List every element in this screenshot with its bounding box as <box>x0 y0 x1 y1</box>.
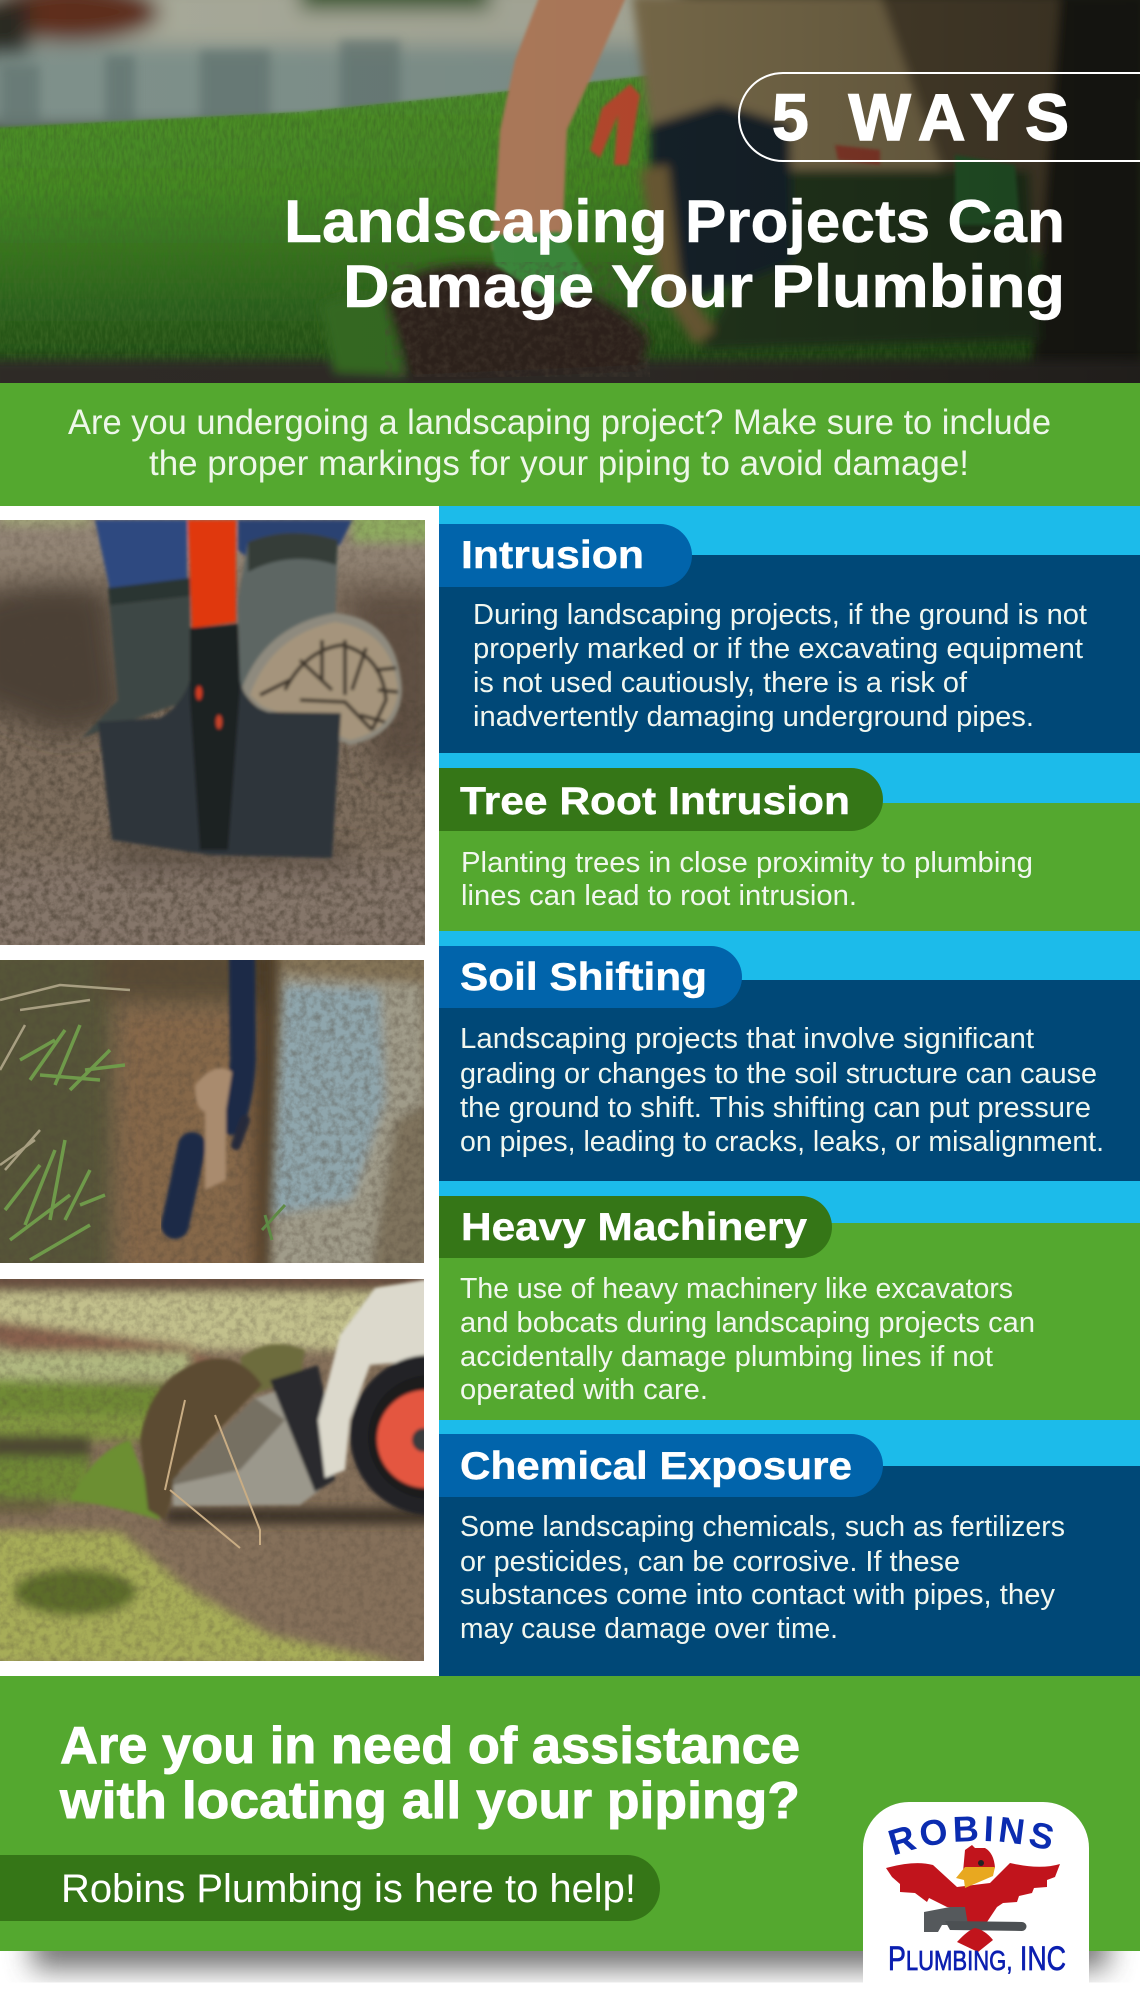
intro banner: Are you undergoing a landscaping project? Make sure to include <box>68 403 1051 442</box>
heading pill: tree root intrusion <box>439 768 883 831</box>
body text: chemical exposure: may cause damage over time. <box>460 1613 838 1645</box>
call to action heading <box>59 1717 800 1830</box>
panel: tree root intrusion <box>439 753 1140 931</box>
heading pill: chemical exposure: Chemical Exposure <box>460 1445 852 1488</box>
photo: worker rolling out turf <box>0 0 1140 400</box>
help pill: Robins Plumbing is here to help! <box>61 1867 636 1911</box>
body text: heavy machinery: The use of heavy machinery like excavators <box>460 1273 1013 1305</box>
logo wordmark: Robins: ROBINS <box>888 1816 1053 1855</box>
photo: tree root breaking a buried pipe <box>0 960 424 1263</box>
photo: boot pushing a shovel into soil <box>0 520 425 945</box>
body text: soil shifting: the ground to shift. This shifting can put pressure <box>460 1092 1091 1124</box>
body text: soil shifting: Landscaping projects that involve significant <box>460 1023 1034 1055</box>
title <box>284 188 1065 320</box>
call to action heading: Are you in need of assistance <box>60 1717 800 1775</box>
body text: heavy machinery: and bobcats during landscaping projects can <box>460 1307 1035 1339</box>
footer drop shadow <box>32 1925 1108 1969</box>
heading pill: heavy machinery: Heavy Machinery <box>461 1206 807 1249</box>
body text: chemical exposure <box>460 1511 1065 1645</box>
panel: soil shifting <box>439 931 1140 1181</box>
5 ways outlined tab: 5 WAYS <box>772 80 1069 154</box>
intro banner: the proper markings for your piping to avoid damage! <box>149 444 969 483</box>
body text: heavy machinery: accidentally damage plumbing lines if not <box>460 1341 993 1373</box>
body text: tree root intrusion <box>461 847 1033 912</box>
body text: tree root intrusion: Planting trees in close proximity to plumbing <box>461 847 1033 879</box>
heading pill: intrusion <box>439 524 692 587</box>
title: Landscaping Projects Can <box>284 188 1065 255</box>
body text: soil shifting <box>460 1023 1104 1158</box>
call to action heading: with locating all your piping? <box>59 1772 800 1830</box>
body text: chemical exposure: substances come into contact with pipes, they <box>460 1579 1056 1611</box>
title: Damage Your Plumbing <box>343 253 1065 320</box>
body text: heavy machinery: operated with care. <box>460 1374 708 1406</box>
heading pill: soil shifting <box>439 946 742 1008</box>
panel: hero photo and title <box>0 0 1140 400</box>
body text: tree root intrusion: lines can lead to root intrusion. <box>461 880 857 912</box>
logo wordmark: Plumbing, Inc: PLUMBING, INC <box>888 1940 1066 1978</box>
panel: chemical exposure <box>439 1420 1140 1676</box>
heading pill: intrusion: Intrusion <box>461 534 644 577</box>
body text: chemical exposure: or pesticides, can be corrosive. If these <box>460 1546 960 1578</box>
heading pill: tree root intrusion: Tree Root Intrusion <box>460 780 850 823</box>
icon: red robin holding a pipe wrench <box>886 1845 1060 1952</box>
heading pill: chemical exposure <box>439 1434 883 1497</box>
body text: intrusion: is not used cautiously, there is a risk of <box>473 667 968 699</box>
intro banner <box>0 383 1140 506</box>
panel: call to action <box>0 1676 1140 1951</box>
heading pill: soil shifting: Soil Shifting <box>460 956 707 999</box>
logo: Robins Plumbing badge <box>863 1802 1089 1982</box>
body text: intrusion: inadvertently damaging underground pipes. <box>473 701 1034 733</box>
body text: soil shifting: on pipes, leading to cracks, leaks, or misalignment. <box>460 1126 1104 1158</box>
panel: intrusion <box>439 506 1140 753</box>
heading pill: heavy machinery <box>439 1196 832 1258</box>
photo: skid steer lifting sod <box>0 1279 424 1661</box>
body text: intrusion: During landscaping projects, if the ground is not <box>473 599 1087 631</box>
5 ways outlined tab <box>739 73 1140 161</box>
help pill <box>0 1855 660 1921</box>
body text: soil shifting: grading or changes to the soil structure can cause <box>460 1058 1097 1090</box>
body text: chemical exposure: Some landscaping chemicals, such as fertilizers <box>460 1511 1065 1543</box>
body text: heavy machinery <box>460 1273 1035 1406</box>
panel: heavy machinery <box>439 1181 1140 1420</box>
body text: intrusion: properly marked or if the excavating equipment <box>473 633 1083 665</box>
body text: intrusion <box>473 599 1087 733</box>
